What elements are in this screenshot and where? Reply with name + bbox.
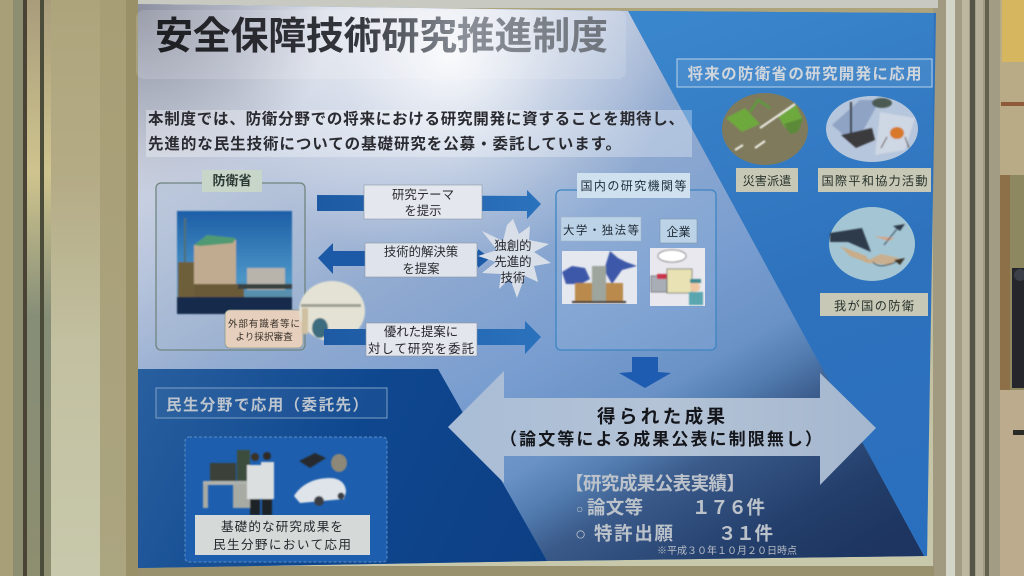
arrow: research theme: 研究テーマ <box>392 188 454 202</box>
arrow: technical solutions: を提案 <box>402 261 440 276</box>
results text block: 【研究成果公表実績】 <box>565 473 745 494</box>
heading: civilian application <box>156 388 387 418</box>
callout: external review: より採択審査 <box>235 331 293 343</box>
icon: university building <box>562 251 637 304</box>
label: universities: 大学・独法等 <box>563 223 639 237</box>
icon: international peace cooperation <box>826 96 918 162</box>
results text block: ※平成３０年１０月２０日時点 <box>657 544 797 557</box>
heading: 国内の研究機関等 <box>577 173 690 198</box>
icon: company factory <box>650 248 705 306</box>
callout: external review <box>225 310 303 348</box>
panel: poster background <box>138 4 936 568</box>
title: 安全保障技術研究推進制度 <box>155 16 608 58</box>
arrow: technical solutions: 技術的解決策 <box>384 244 458 259</box>
double-headed arrow: results: 得られた成果 <box>597 406 725 427</box>
label: 災害派遣: 災害派遣 <box>743 173 791 188</box>
callout: unique advanced technology: 技術 <box>501 270 525 285</box>
heading: future MoD R&D: 将来の防衛省の研究開発に応用 <box>688 64 922 83</box>
heading: 国内の研究機関等: 国内の研究機関等 <box>580 179 686 193</box>
intro text block: 本制度では、防衛分野での将来における研究開発に資することを期待し、 <box>148 109 684 128</box>
label: 国際平和協力活動 <box>818 168 931 192</box>
results text block: ３１件 <box>718 523 773 544</box>
results text block: ○ <box>575 523 586 544</box>
panel: domestic research institutions <box>556 173 716 350</box>
top-left shade <box>138 4 340 200</box>
heading: 防衛省 <box>202 170 262 192</box>
illustration: researchers and lab equipment <box>203 450 274 515</box>
arrow: commission research: 優れた提案に <box>384 324 458 339</box>
caption: 民生分野において応用 <box>213 538 351 552</box>
intro text block <box>146 109 692 157</box>
heading: future MoD R&D <box>677 59 932 87</box>
panel: dark blue lower band <box>138 369 547 568</box>
panel: blue right triangle <box>628 11 934 556</box>
label: companies <box>660 219 697 243</box>
callout: external review: 外部有識者等に <box>228 318 300 330</box>
arrow: technical solutions <box>318 243 490 277</box>
callout: unique advanced technology <box>478 219 551 298</box>
label: 災害派遣 <box>736 168 798 192</box>
label: universities <box>561 217 641 241</box>
results text block: 論文等 <box>587 497 643 518</box>
illustration: device, part and car <box>294 453 347 506</box>
label: companies: 企業 <box>666 225 691 239</box>
caption: 基礎的な研究成果を <box>221 519 343 534</box>
heading: civilian application: 民生分野で応用（委託先） <box>166 396 368 414</box>
icon: review meeting photo <box>299 281 365 341</box>
results text block <box>565 473 797 557</box>
results text block: １７６件 <box>692 497 765 518</box>
arrow: research theme: を提示 <box>404 203 442 218</box>
icon: national defense jets <box>829 207 915 281</box>
highlight glare <box>138 4 820 369</box>
callout: unique advanced technology: 先進的 <box>494 254 532 269</box>
caption <box>195 515 370 555</box>
arrow: downward to results <box>619 357 671 388</box>
arrow: commission research <box>324 321 541 356</box>
double-headed arrow: results <box>448 371 876 485</box>
title panel <box>136 10 626 79</box>
arrow: research theme <box>317 185 541 219</box>
panel: Ministry of Defense <box>156 170 305 350</box>
double-headed arrow: results: （論文等による成果公表に制限無し） <box>500 429 822 449</box>
photo: ministry buildings <box>177 211 292 314</box>
label: 我が国の防衛: 我が国の防衛 <box>834 298 914 313</box>
label: 我が国の防衛 <box>820 293 928 316</box>
icon: disaster relief <box>722 93 808 165</box>
panel: light gradient area <box>138 4 924 561</box>
label: 国際平和協力活動: 国際平和協力活動 <box>822 173 928 188</box>
panel: civilian application <box>185 437 387 562</box>
results text block: 特許出願 <box>594 523 673 544</box>
results text block: ○ <box>576 502 583 516</box>
callout: unique advanced technology: 独創的 <box>494 238 532 253</box>
heading: 防衛省: 防衛省 <box>212 173 252 188</box>
intro text block: 先進的な民生技術についての基礎研究を公募・委託しています。 <box>148 134 621 153</box>
arrow: commission research: 対して研究を委託 <box>368 342 474 356</box>
